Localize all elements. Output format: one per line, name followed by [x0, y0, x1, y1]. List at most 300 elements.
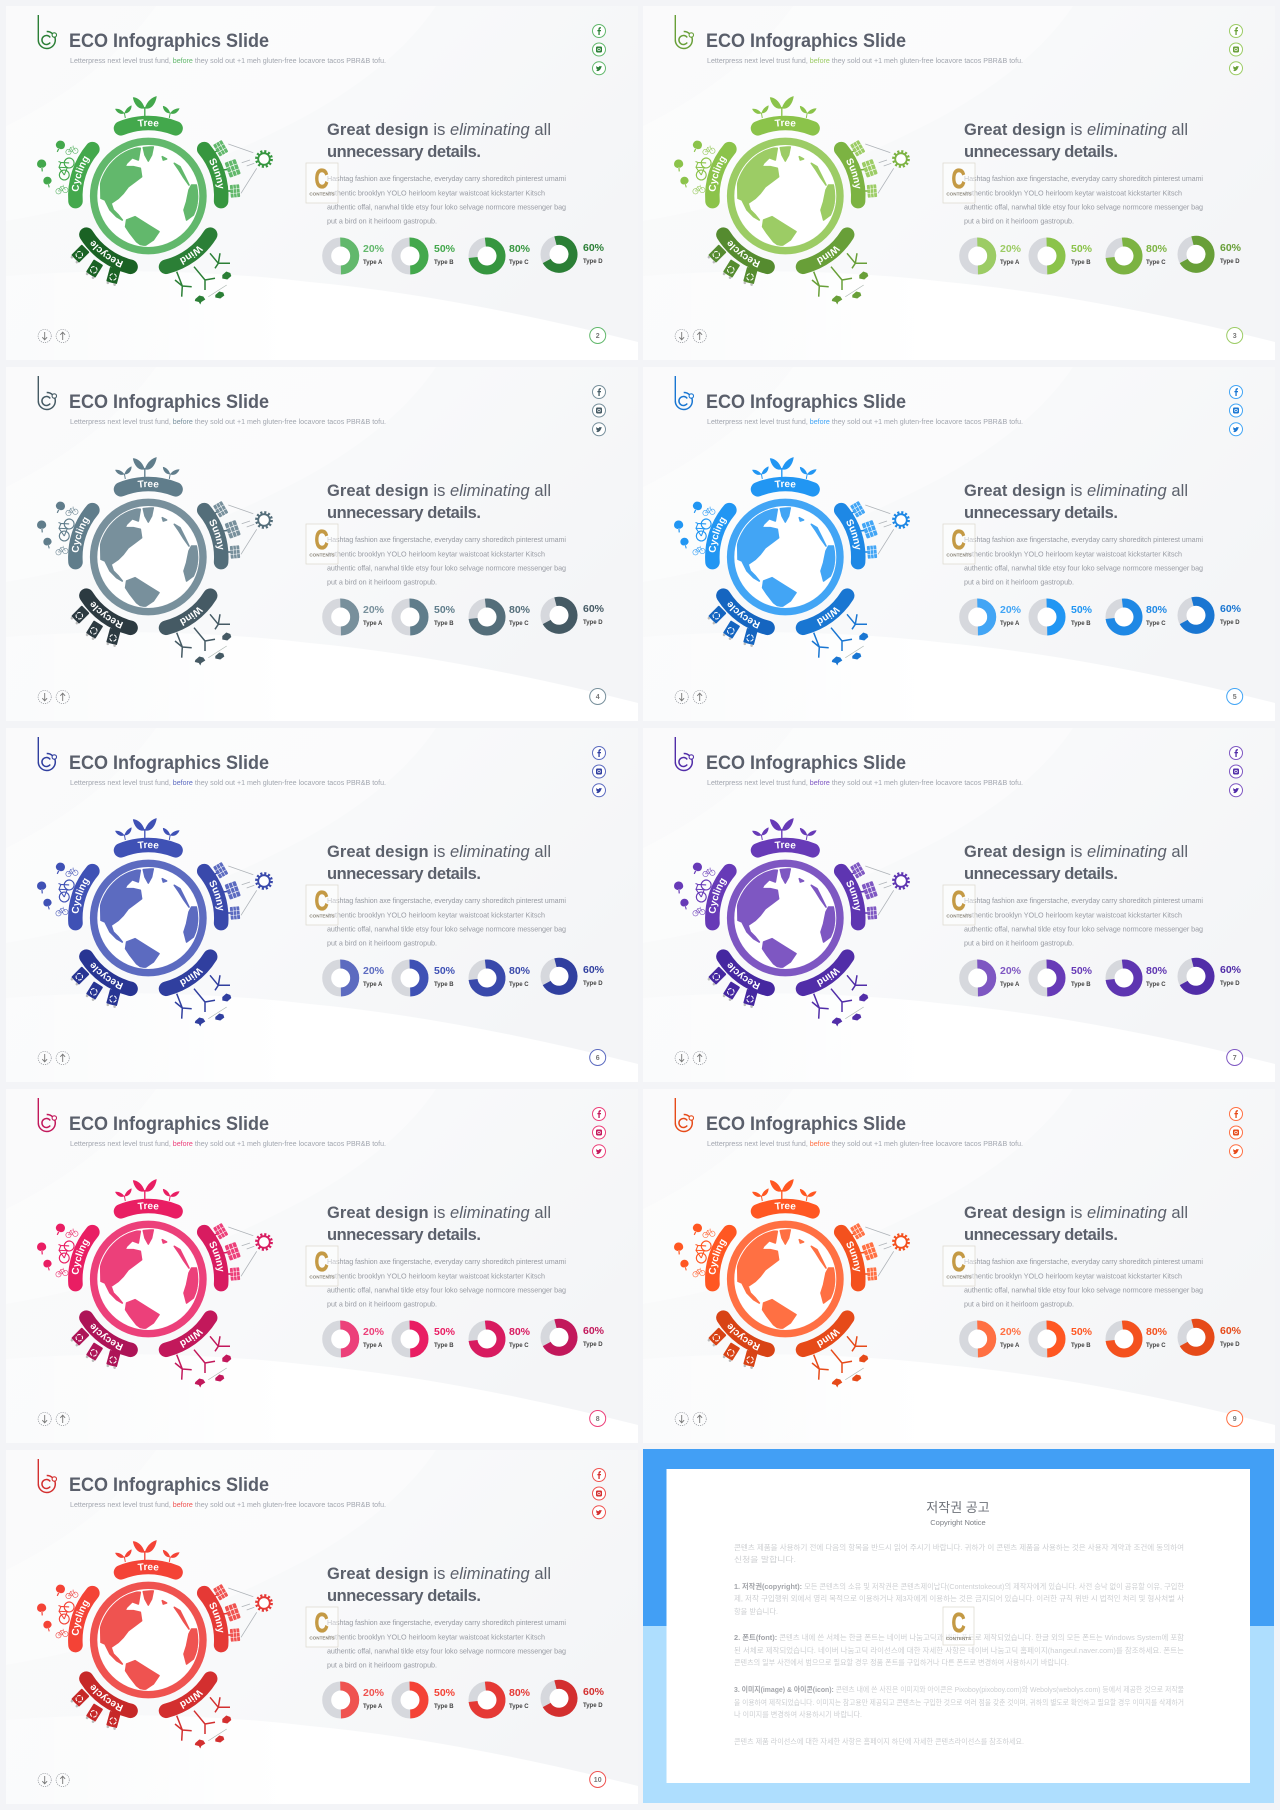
sector: recycle	[70, 588, 138, 647]
section 2: 된 서체로 제작되었습니다. 네이버 나눔고딕 라이선스에 대한 자세한 사항은 네이버 나눔고딕 홈페이지(hangeul.naver.com)를 참조하세요. 폰트는	[734, 1646, 1184, 1655]
watermark: CONTENTS	[946, 192, 972, 196]
donut A	[327, 603, 355, 631]
slide 5: blue	[643, 367, 1275, 721]
heading	[964, 1204, 1188, 1244]
label B: Type B	[1071, 260, 1091, 266]
label B	[1071, 965, 1093, 988]
label B	[434, 965, 456, 988]
label B	[434, 604, 456, 627]
sector: wind	[796, 949, 868, 1026]
watermark: CONTENTS	[946, 1274, 972, 1280]
sector: sunny: Sunny	[846, 158, 860, 188]
label B	[1071, 604, 1093, 627]
watermark: CONTENTS	[309, 192, 335, 196]
intro: 신청을 말합니다.	[734, 1555, 796, 1564]
label C: 80%	[1146, 1326, 1168, 1338]
label D: 60%	[583, 1686, 605, 1698]
label C: Type C	[509, 621, 529, 627]
label D	[1220, 603, 1242, 626]
donut B	[1033, 1325, 1061, 1353]
slide 10: red	[6, 1450, 638, 1804]
logo	[675, 737, 694, 770]
eco diagram	[674, 818, 910, 1026]
social icons	[592, 746, 606, 797]
donut B	[1033, 603, 1061, 631]
sector: wind: Wind	[180, 1329, 204, 1348]
social icons	[592, 386, 606, 436]
label A	[1000, 1326, 1022, 1349]
heading	[327, 1565, 551, 1605]
donut B	[396, 1325, 424, 1353]
body text: authentic brooklyn YOLO heirloom keytar waistcoat kickstarter Kitsch	[327, 1272, 545, 1280]
label C: 80%	[1146, 604, 1168, 616]
subtitle: Letterpress next level trust fund, before they sold out +1 meh gluten-free locavore tacos PBR&B tofu.	[70, 419, 386, 426]
logo	[38, 737, 56, 770]
section 3: 을 이용하여 제작되었습니다. 이미지는 참고용만 제공되고 콘텐츠는 구입한 것으로 여러 점을 갖춘 것이며, 귀하의 별도로 확인하고 필요할 경우 이미지를 삭제하거	[734, 1698, 1184, 1707]
sector: tree	[750, 818, 820, 858]
sector: tree: Tree	[774, 119, 796, 126]
body text: authentic offal, narwhal tilde etsy four loko selvage normcore messenger bag	[327, 1286, 566, 1294]
page number: 10	[594, 1777, 602, 1784]
page number	[1227, 1050, 1243, 1066]
sector: tree: Tree	[774, 841, 796, 848]
sector: wind: Wind	[180, 968, 204, 987]
sector: cycling: Cycling	[72, 1239, 90, 1274]
label C: 80%	[1146, 965, 1168, 977]
page number	[1227, 1410, 1243, 1426]
sector: sunny: Sunny	[210, 158, 224, 188]
label D	[583, 603, 605, 626]
label B: Type B	[1071, 621, 1091, 627]
donut A	[964, 1325, 992, 1353]
label A: 20%	[1000, 1326, 1022, 1338]
heading	[964, 843, 1188, 883]
body text: Hashtag fashion axe fingerstache, everyday carry shoreditch pinterest umami	[327, 535, 566, 544]
watermark	[306, 163, 338, 203]
label D: 60%	[583, 603, 605, 615]
heading	[327, 482, 551, 522]
heading: Great design is eliminating all	[327, 1204, 551, 1222]
donut C	[1109, 241, 1139, 271]
donut B	[396, 1686, 424, 1714]
label A	[363, 965, 385, 988]
label B: 50%	[1071, 243, 1093, 255]
heading: unnecessary details.	[964, 143, 1118, 161]
body text: put a bird on it heirloom gastropub.	[327, 1660, 437, 1670]
body text: put a bird on it heirloom gastropub.	[327, 216, 437, 226]
heading: unnecessary details.	[327, 143, 481, 161]
sector: tree: Tree	[774, 1202, 796, 1210]
eco diagram	[37, 1540, 272, 1748]
watermark	[306, 1607, 338, 1647]
body text	[964, 896, 1203, 948]
page number	[590, 1410, 606, 1426]
sector: cycling	[37, 1222, 93, 1284]
label B: Type B	[434, 982, 454, 988]
label C	[509, 1326, 531, 1349]
sector: tree	[114, 457, 183, 497]
navigation arrows	[38, 329, 69, 343]
frame bottom	[643, 1626, 1274, 1803]
heading: unnecessary details.	[327, 1587, 481, 1605]
page number	[1227, 328, 1243, 344]
sector: wind	[158, 949, 232, 1026]
globe	[731, 1224, 840, 1334]
label A: Type A	[1000, 1343, 1020, 1349]
page number: 5	[1233, 694, 1237, 701]
label C	[509, 1687, 531, 1710]
globe	[731, 502, 840, 612]
page number: 6	[596, 1055, 600, 1062]
globe	[94, 1224, 203, 1334]
watermark: C	[952, 164, 965, 195]
section 3: 나 이미지를 변경하여 사용하시기 바랍니다.	[734, 1710, 862, 1719]
heading	[964, 121, 1188, 161]
label C: Type C	[1146, 1343, 1166, 1349]
body text: authentic brooklyn YOLO heirloom keytar waistcoat kickstarter Kitsch	[964, 910, 1182, 920]
sector: sunny	[196, 501, 273, 570]
donut D	[542, 960, 576, 993]
sector: cycling	[37, 862, 100, 930]
navigation arrows	[675, 1051, 706, 1065]
heading	[327, 843, 551, 883]
closing note: 콘텐츠 제품 라이선스에 대한 자세한 사항은 홈페이지 하단에 자세한 콘텐츠라이선스를 참조하세요.	[734, 1737, 1024, 1746]
label B: 50%	[434, 1326, 456, 1338]
body text: put a bird on it heirloom gastropub.	[327, 938, 437, 948]
sector: recycle	[70, 1318, 131, 1369]
navigation arrows	[675, 690, 706, 704]
label C	[509, 965, 531, 988]
heading: unnecessary details.	[327, 1226, 481, 1244]
body text	[327, 174, 566, 226]
copyright title: 저작권 공고	[926, 1500, 990, 1515]
sector: recycle	[70, 949, 138, 1008]
body text: authentic offal, narwhal tilde etsy four loko selvage normcore messenger bag	[327, 564, 566, 572]
subtitle: Letterpress next level trust fund, before they sold out +1 meh gluten-free locavore tacos PBR&B tofu.	[707, 419, 1023, 426]
label A: Type A	[1000, 621, 1020, 627]
label D: Type D	[583, 981, 603, 987]
heading	[964, 482, 1188, 522]
label B: Type B	[434, 1343, 454, 1349]
sector: recycle: Recycle	[728, 962, 760, 990]
donut A	[964, 242, 992, 270]
eco diagram	[674, 457, 910, 666]
label D	[1220, 964, 1242, 987]
label D	[583, 242, 605, 265]
label A: Type A	[1000, 982, 1020, 988]
body text	[964, 1257, 1203, 1308]
body text: authentic offal, narwhal tilde etsy four loko selvage normcore messenger bag	[964, 564, 1203, 572]
label B	[434, 1687, 456, 1710]
donut A	[327, 1325, 355, 1353]
logo	[675, 15, 694, 48]
label C: Type C	[509, 1343, 529, 1349]
eco diagram	[674, 1179, 909, 1388]
label A	[363, 1687, 385, 1710]
label C: 80%	[1146, 243, 1168, 255]
sector: sunny	[834, 140, 910, 208]
label D: 60%	[1220, 603, 1242, 615]
sector: recycle	[70, 227, 138, 286]
sector: tree	[114, 96, 183, 136]
body text: Hashtag fashion axe fingerstache, everyday carry shoreditch pinterest umami	[327, 174, 566, 183]
sector: tree	[750, 457, 820, 497]
donut B	[396, 964, 424, 992]
body text	[964, 535, 1203, 586]
title: ECO Infographics Slide	[69, 1114, 269, 1135]
body text: authentic offal, narwhal tilde etsy four loko selvage normcore messenger bag	[327, 1646, 566, 1656]
section 1: 항을 받습니다.	[734, 1607, 778, 1616]
label D: Type D	[583, 1342, 603, 1348]
title: ECO Infographics Slide	[706, 31, 906, 52]
label C: Type C	[1146, 982, 1166, 988]
label A: 20%	[1000, 965, 1022, 977]
social icons	[1230, 1108, 1242, 1158]
logo	[675, 1098, 694, 1131]
donut C	[472, 963, 502, 993]
heading: unnecessary details.	[964, 1226, 1118, 1244]
label D	[583, 1325, 605, 1348]
title: ECO Infographics Slide	[69, 31, 269, 52]
heading: unnecessary details.	[327, 504, 481, 522]
donut C	[472, 602, 502, 632]
sector: cycling	[37, 1583, 93, 1645]
sector: recycle: Recycle	[90, 1324, 124, 1351]
social icons	[1230, 746, 1242, 797]
eco diagram	[674, 96, 910, 304]
sector: wind: Wind	[816, 968, 840, 987]
label A: Type A	[1000, 260, 1020, 266]
logo	[38, 15, 56, 48]
page number	[1227, 688, 1243, 704]
sector: recycle: Recycle	[90, 962, 124, 990]
watermark	[306, 1246, 338, 1286]
slide 3: light green	[643, 6, 1275, 360]
sector: sunny: Sunny	[205, 1600, 228, 1636]
eco diagram	[37, 457, 273, 666]
page number: 7	[1233, 1055, 1237, 1062]
donut C	[472, 241, 502, 271]
label B: 50%	[1071, 965, 1093, 977]
sector: cycling: Cycling	[72, 156, 90, 192]
sector: cycling	[674, 861, 730, 923]
sector: wind	[796, 227, 868, 304]
sector: cycling: Cycling	[708, 1239, 727, 1274]
sector: recycle	[708, 588, 775, 647]
sector: wind: Wind	[180, 246, 204, 265]
label D: 60%	[1220, 1325, 1242, 1337]
slide 8: pink	[6, 1089, 638, 1443]
sector: recycle	[707, 957, 768, 1008]
watermark: C	[952, 525, 965, 556]
label C	[1146, 243, 1168, 266]
watermark: CONTENTS	[309, 552, 335, 558]
donut A	[327, 1686, 355, 1714]
body text: Hashtag fashion axe fingerstache, everyday carry shoreditch pinterest umami	[964, 535, 1203, 544]
navigation arrows	[38, 1051, 69, 1065]
label A: Type A	[363, 1343, 383, 1349]
globe	[94, 502, 203, 612]
donut A	[964, 964, 992, 992]
subtitle: Letterpress next level trust fund, before they sold out +1 meh gluten-free locavore tacos PBR&B tofu.	[707, 58, 1023, 65]
watermark: CONTENTS	[309, 1274, 335, 1280]
label A	[1000, 243, 1022, 266]
section 1: 제, 저작 구입행위 외에서 영리 목적으로 이용하거나 제3자에게 이용하는 것은 금지되어 있습니다. 이러한 규칙 위반 시 법적인 처리 및 형사처벌 사	[734, 1594, 1184, 1603]
page number	[590, 688, 606, 704]
page number: 8	[596, 1416, 600, 1423]
donut D	[1179, 599, 1213, 632]
intro: 콘텐츠 제품을 사용하기 전에 다음의 항목을 반드시 읽어 주시기 바랍니다. 귀하가 이 콘텐츠 제품을 사용하는 것은 사용자 계약과 조건에 동의하여	[734, 1543, 1184, 1552]
navigation arrows	[675, 329, 706, 343]
sector: recycle: Recycle	[728, 602, 760, 629]
social icons	[1230, 24, 1242, 75]
sector: tree: Tree	[138, 480, 158, 488]
sector: cycling	[37, 502, 100, 570]
logo	[675, 376, 694, 409]
label D	[583, 1686, 605, 1709]
label D: 60%	[1220, 964, 1242, 976]
social icons	[592, 1108, 606, 1158]
social icons	[592, 1468, 606, 1519]
body text: authentic offal, narwhal tilde etsy four loko selvage normcore messenger bag	[327, 924, 566, 934]
section 1: 1. 저작권(copyright): 모든 콘텐츠의 소유 및 저작권은 콘텐츠제이납다(Contentstokeout)의 제작자에게 있습니다. 사전 승낙 없이 공유할 이유, 구입한	[734, 1582, 1184, 1591]
label C: 80%	[509, 604, 531, 616]
sector: cycling: Cycling	[72, 878, 90, 914]
heading: Great design is eliminating all	[327, 121, 551, 139]
body text: authentic brooklyn YOLO heirloom keytar waistcoat kickstarter Kitsch	[327, 1632, 545, 1642]
navigation arrows	[38, 1412, 69, 1426]
slide 9: orange	[643, 1089, 1275, 1443]
social icons	[1230, 386, 1242, 436]
page number: 9	[1233, 1416, 1237, 1423]
heading: Great design is eliminating all	[327, 843, 551, 861]
sector: sunny	[196, 862, 273, 930]
sector: wind	[166, 1679, 231, 1748]
title: ECO Infographics Slide	[706, 392, 906, 413]
body text: Hashtag fashion axe fingerstache, everyday carry shoreditch pinterest umami	[327, 1618, 566, 1627]
label A	[363, 243, 385, 266]
globe	[94, 863, 203, 973]
label D	[583, 964, 605, 987]
navigation arrows	[675, 1412, 706, 1426]
label A	[363, 1326, 385, 1349]
heading: unnecessary details.	[964, 504, 1118, 522]
sector: wind	[158, 588, 232, 666]
sector: cycling: Cycling	[708, 156, 727, 192]
sector: tree: Tree	[137, 1562, 160, 1574]
subtitle: Letterpress next level trust fund, before they sold out +1 meh gluten-free locavore tacos PBR&B tofu.	[70, 58, 386, 65]
sector: sunny: Sunny	[846, 519, 860, 550]
watermark	[306, 524, 338, 564]
label D	[1220, 242, 1242, 265]
sector: wind: Wind	[177, 1686, 205, 1711]
eco diagram	[37, 96, 273, 304]
body text: Hashtag fashion axe fingerstache, everyday carry shoreditch pinterest umami	[964, 1257, 1203, 1266]
label D: Type D	[1220, 1342, 1240, 1348]
donut B	[1033, 242, 1061, 270]
watermark	[943, 1246, 975, 1286]
copyright title: Copyright Notice	[930, 1518, 986, 1527]
donut A	[964, 603, 992, 631]
intro	[734, 1543, 1184, 1564]
label B: Type B	[434, 260, 454, 266]
sector: cycling	[674, 140, 737, 208]
sector: sunny: Sunny	[210, 519, 224, 550]
page number: 4	[596, 694, 600, 701]
label C	[509, 604, 531, 627]
sector: tree	[115, 1179, 180, 1213]
label B: 50%	[1071, 1326, 1093, 1338]
body text: authentic offal, narwhal tilde etsy four loko selvage normcore messenger bag	[964, 202, 1203, 212]
label A: Type A	[363, 621, 383, 627]
body text: put a bird on it heirloom gastropub.	[327, 578, 437, 586]
watermark: CONTENTS	[946, 914, 972, 918]
label C: 80%	[509, 1326, 531, 1338]
label B	[434, 243, 456, 266]
watermark: CONTENTS	[946, 552, 972, 558]
label A: 20%	[363, 243, 385, 255]
donut C	[1109, 602, 1139, 632]
donut B	[396, 603, 424, 631]
label C: Type C	[1146, 621, 1166, 627]
heading: Great design is eliminating all	[964, 482, 1188, 500]
label D	[1220, 1325, 1242, 1348]
donut D	[1179, 960, 1213, 993]
sector: wind: Wind	[816, 1329, 840, 1348]
body text: put a bird on it heirloom gastropub.	[964, 578, 1074, 586]
sector: sunny	[841, 1223, 909, 1284]
sector: recycle: Recycle	[90, 602, 124, 629]
label B: 50%	[1071, 604, 1093, 616]
globe	[94, 1585, 203, 1695]
navigation arrows	[38, 1773, 69, 1787]
sector: recycle	[70, 1679, 131, 1730]
label C: 80%	[509, 243, 531, 255]
heading: Great design is eliminating all	[964, 121, 1188, 139]
label D: 60%	[583, 242, 605, 254]
body text: put a bird on it heirloom gastropub.	[327, 1300, 437, 1308]
title: ECO Infographics Slide	[69, 753, 269, 774]
label A: Type A	[363, 260, 383, 266]
label D: Type D	[583, 620, 603, 626]
social icons	[592, 24, 606, 75]
donut D	[542, 1321, 576, 1354]
white sheet	[666, 1469, 1250, 1783]
label C: Type C	[1146, 260, 1166, 266]
watermark: CONTENTS	[309, 1636, 335, 1640]
sector: cycling	[37, 140, 100, 208]
sector: tree: Tree	[138, 841, 158, 848]
label C: 80%	[509, 1687, 531, 1699]
label B: 50%	[434, 604, 456, 616]
page number: 2	[596, 333, 600, 340]
label D: 60%	[583, 1325, 605, 1337]
watermark: CONTENTS	[309, 914, 335, 918]
label D: Type D	[583, 1703, 603, 1709]
label A: 20%	[1000, 604, 1022, 616]
watermark	[943, 163, 975, 203]
label D: 60%	[1220, 242, 1242, 254]
sector: sunny: Sunny	[846, 880, 860, 910]
frame top	[643, 1449, 1274, 1626]
body text: authentic offal, narwhal tilde etsy four loko selvage normcore messenger bag	[964, 924, 1203, 934]
sector: cycling	[674, 502, 737, 570]
globe	[731, 141, 840, 251]
label D: 60%	[583, 964, 605, 976]
label A	[1000, 965, 1022, 988]
label C	[509, 243, 531, 266]
section 2	[734, 1633, 1184, 1667]
